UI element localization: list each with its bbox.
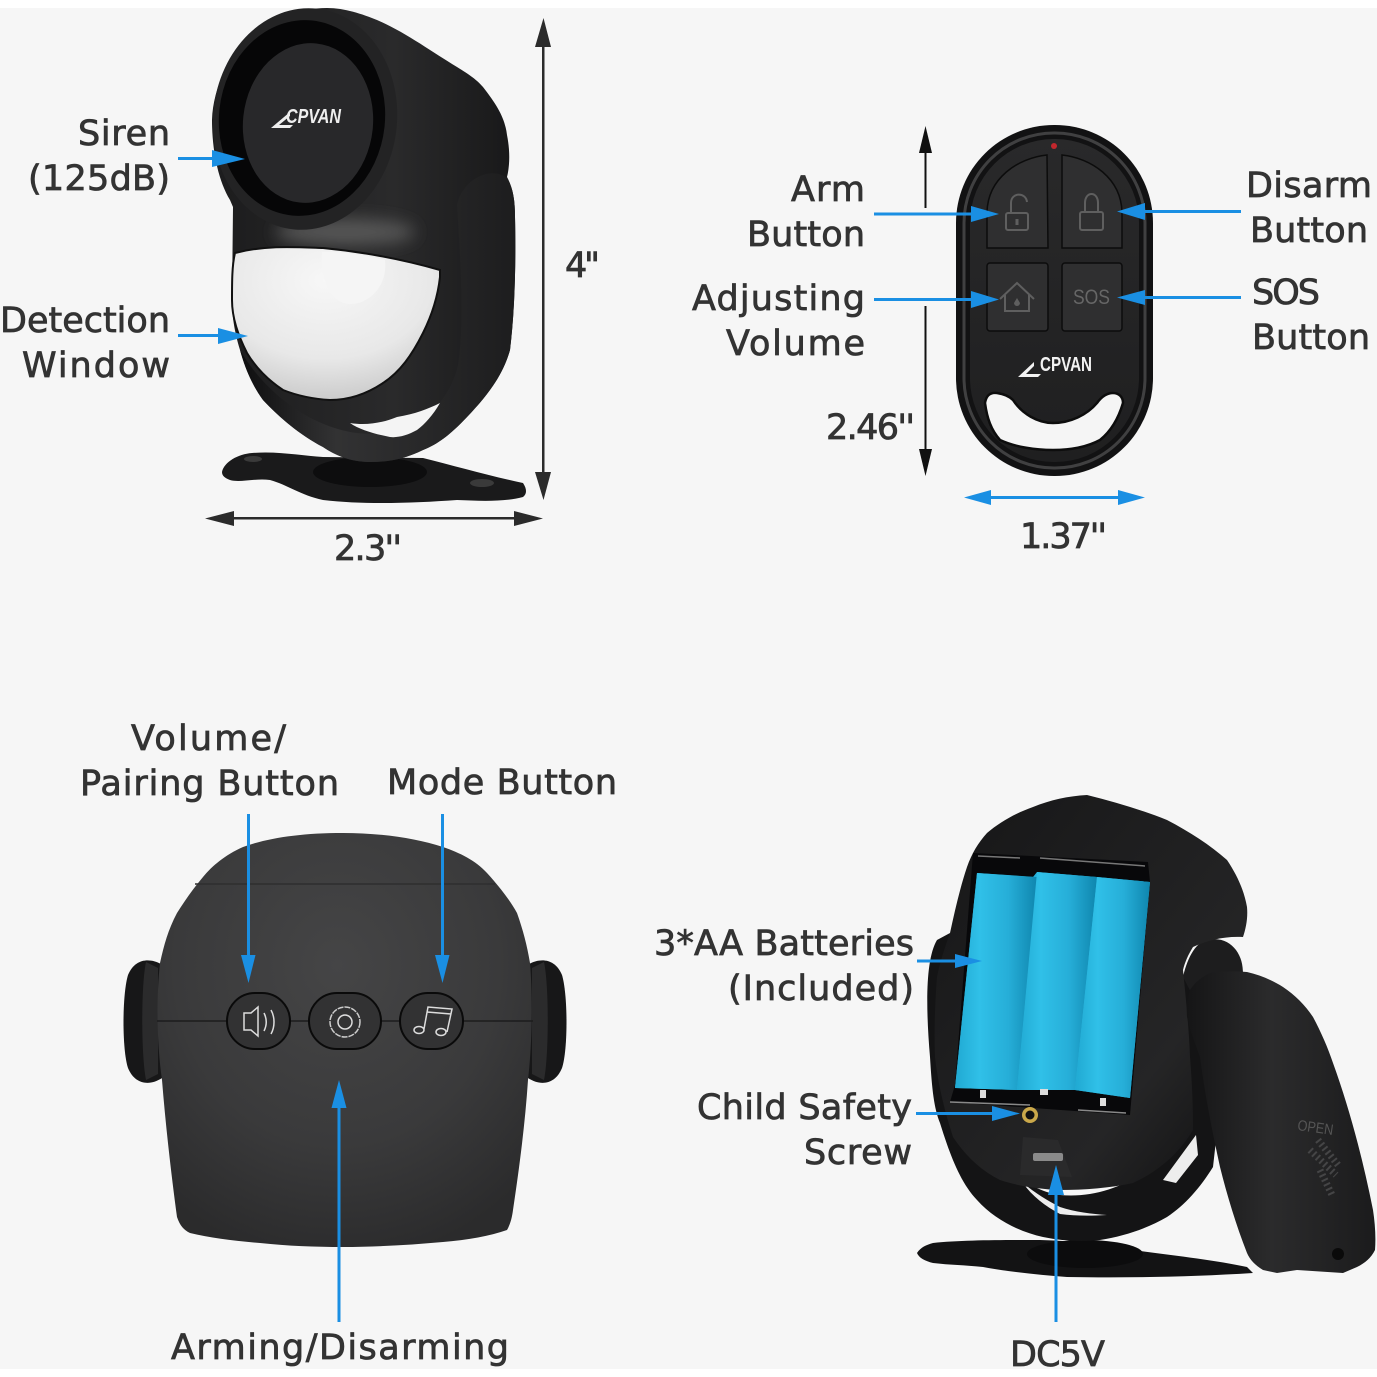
button: SOS [1062,263,1122,331]
button: disarm [1062,155,1122,248]
arrow: disarm button [1117,203,1241,220]
button: SOS: SOS [1073,286,1110,309]
label: Volume Pairing Button: Pairing Button [80,764,339,804]
arrow: detection window label [178,328,248,344]
arrow: child safety screw [916,1106,1020,1121]
dome body [158,833,532,1247]
arm loop behind housing [1183,939,1243,1010]
product: siren motion sensor front view [202,0,526,503]
label: 1.37 inch: 1.37'' [1020,517,1107,557]
LED [1051,143,1057,149]
arrow: siren label [178,150,245,167]
dimension arrow: 4 inch height [535,18,551,500]
label: Siren: (125dB) [28,159,170,199]
label: Child Safety Screw: Child Safety [697,1088,912,1128]
dimension arrow: 1.37 inch width [964,490,1145,505]
arrow: adjusting volume [874,291,999,308]
logo: CPVAN on siren: CPVAN [286,106,341,128]
label: 4 inch: 4'' [565,246,600,286]
child safety screw [1022,1107,1038,1123]
mounting base [222,453,526,503]
label: SOS Button [1252,273,1370,358]
batteries [955,872,1150,1098]
rear swivel arm [927,933,1225,1241]
bottom contacts [950,1102,1126,1113]
battery compartment [950,853,1150,1115]
dimension arrow: 2.46 inch height [919,126,932,476]
arrow: arming disarming button [332,1080,346,1322]
battery cover [1187,971,1375,1273]
logo: CPVAN on remote: CPVAN [1040,354,1092,376]
product: remote control [956,125,1153,476]
detection window dome [232,247,440,400]
label: 2.46 inch: 2.46'' [826,408,915,448]
button: home volume [987,263,1048,331]
button: arm [987,155,1048,248]
label: Mode Button: Mode Button [387,763,617,803]
label: Disarm Button [1246,166,1372,251]
dimension arrow: 2.3 inch width [205,511,543,526]
arrow: SOS button [1117,290,1241,305]
label: Volume Pairing Button: Volume/ [131,719,286,759]
label: Siren: Siren [78,114,170,154]
label: Adjusting Volume: Adjusting [692,279,865,319]
button: arming disarming [309,993,381,1049]
arrow: arm button [874,206,999,222]
siren speaker disc [235,37,381,209]
DC5V port [1020,1137,1072,1177]
label: Arming Disarming: Arming/Disarming [171,1328,509,1368]
button: mode [400,993,463,1049]
label: Arm Button: Button [747,215,865,255]
right side knob [528,960,566,1083]
rear base [917,1240,1253,1277]
button: volume pairing [227,993,290,1049]
label: SOS Button: SOS [1252,273,1320,313]
soft highlight under siren [275,218,415,246]
body and swivel arm silhouette [212,8,515,462]
rear housing [935,795,1247,1190]
logo: CPVAN on remote [1018,354,1092,377]
label: Child Safety Screw [697,1088,912,1173]
label: Detection Window: Detection [0,301,170,341]
label: Child Safety Screw: Screw [804,1133,912,1173]
label: Disarm Button: Disarm [1246,166,1372,206]
left side knob [124,960,162,1083]
logo: CPVAN on siren [271,106,341,128]
top contacts [978,856,1145,866]
arrow: mode button [435,814,450,983]
product: top view with buttons [124,833,566,1247]
label: Adjusting Volume [692,279,865,364]
label: batteries: 3*AA Batteries [654,924,914,964]
label: Arm Button: Arm [791,170,865,210]
arrow: DC5V [1048,1165,1064,1322]
label: batteries: (Included) [728,969,914,1009]
swivel arm [240,173,515,462]
label: Detection Window: Window [22,346,170,386]
arrow: batteries [917,954,982,968]
label: DC5V: DC5V [1010,1335,1105,1375]
label: Adjusting Volume: Volume [726,324,865,364]
siren ring [202,0,408,239]
label: Volume Pairing Button [80,719,339,804]
label: batteries [654,924,914,1009]
label: 2.3 inch: 2.3'' [334,529,402,569]
label: Disarm Button: Button [1250,211,1368,251]
arrow: volume pairing button [241,814,256,983]
label: Detection Window [0,301,170,386]
product: rear view with battery compartment: OPEN [1296,1117,1334,1139]
label: SOS Button: Button [1252,318,1370,358]
label: Arm Button [747,170,865,255]
product: rear view with battery compartment [917,795,1375,1277]
label: Siren [28,114,170,199]
key ring hole [985,393,1123,450]
remote shell [956,125,1153,476]
